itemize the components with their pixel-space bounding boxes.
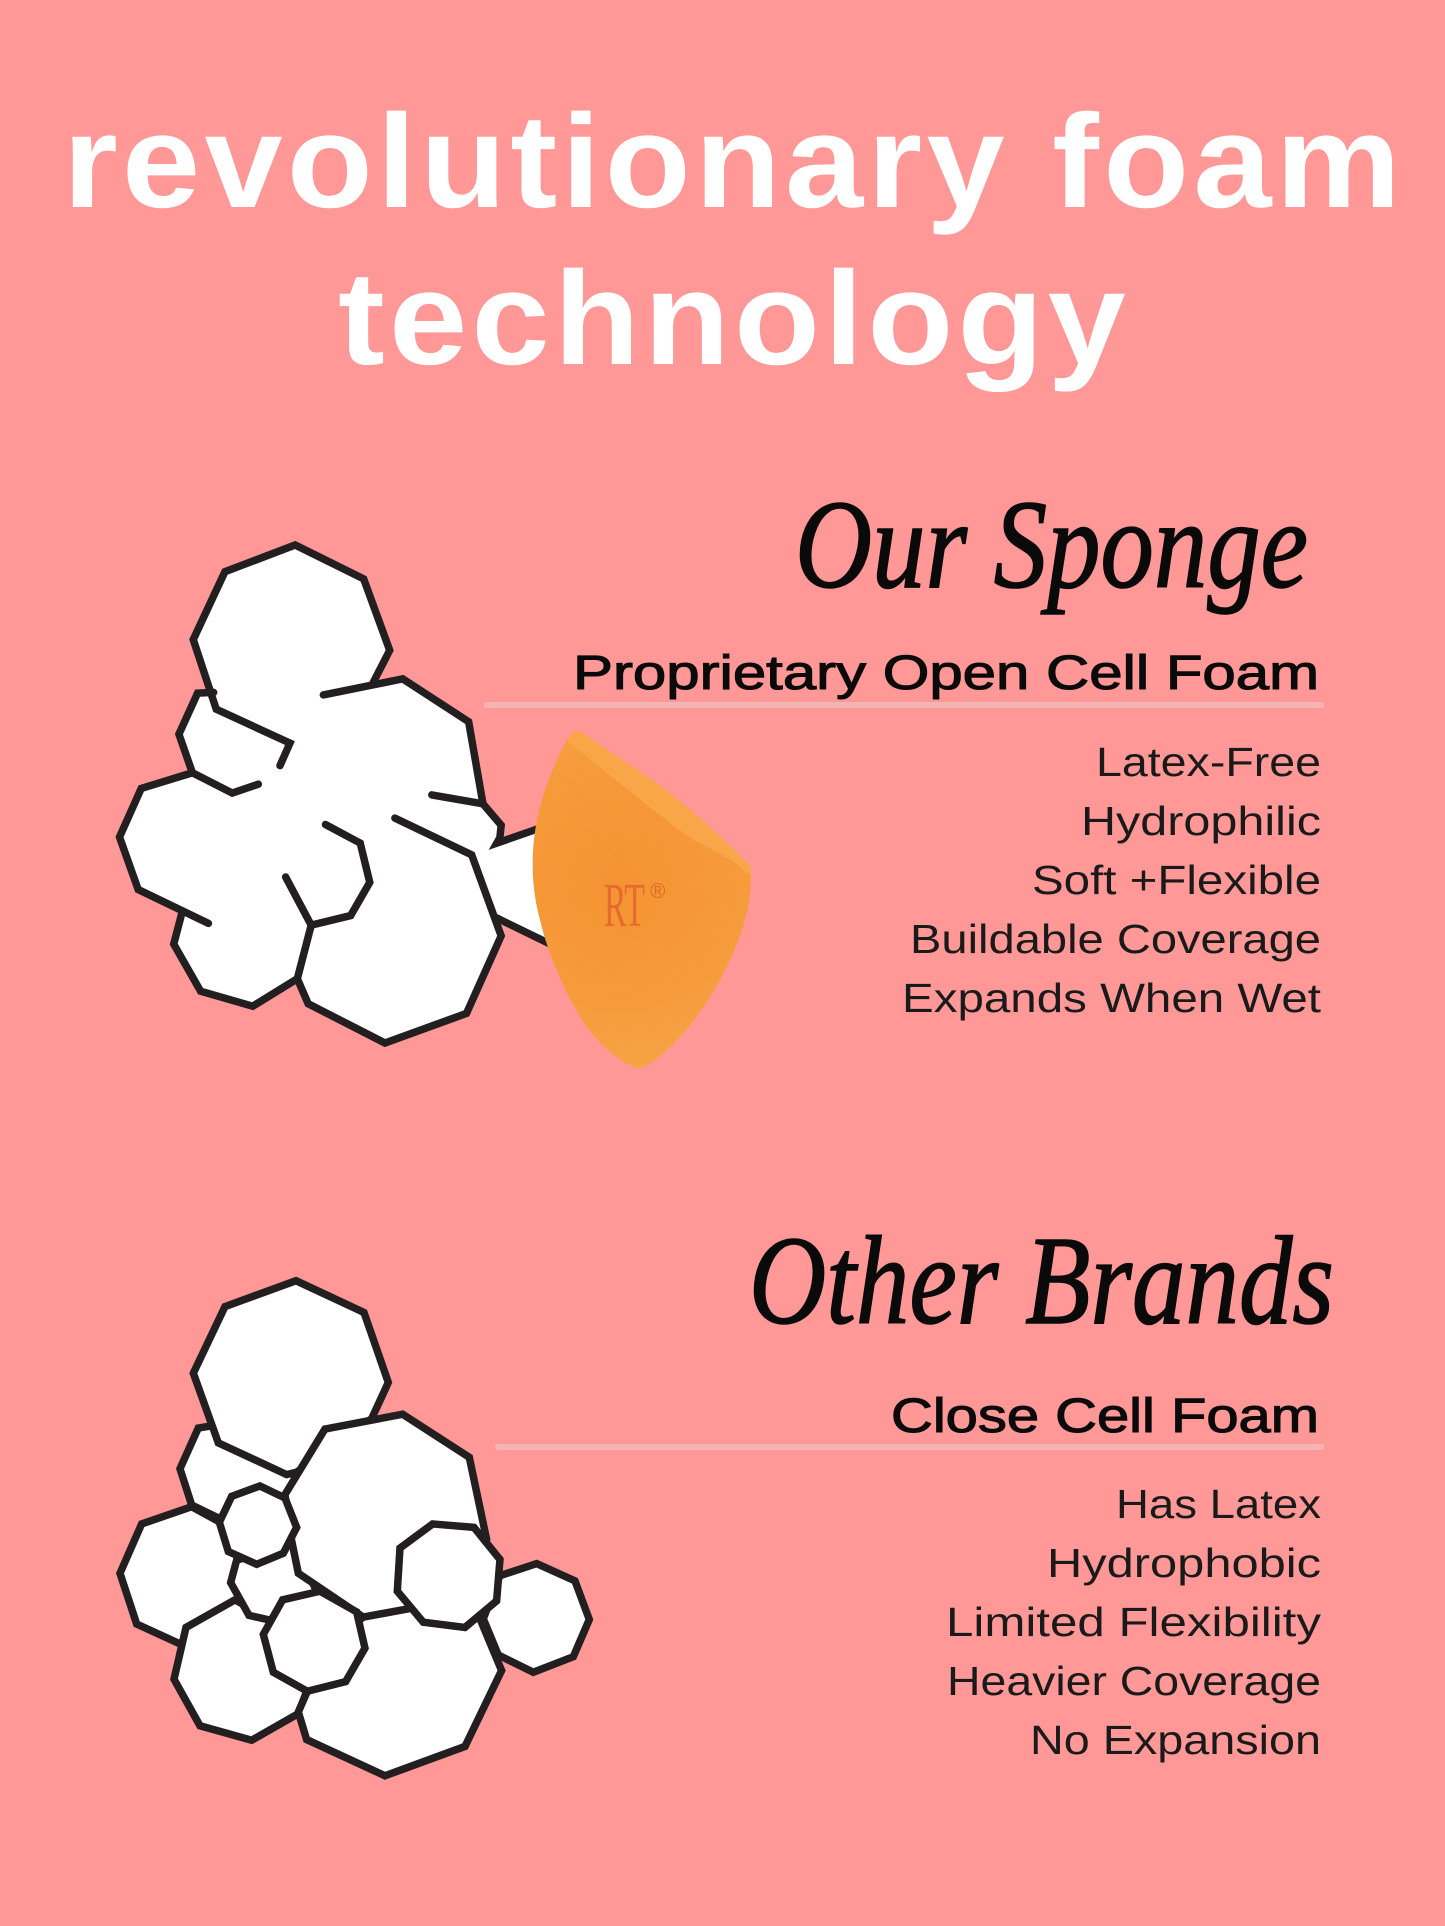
sponge product [533,731,751,1068]
diagram: closed cell foam [120,1281,589,1776]
list: other brands features: Heavier Coverage [947,1658,1321,1704]
title: technology [338,245,1130,393]
list: our sponge features: Buildable Coverage [910,916,1321,962]
title [63,88,1405,393]
subheading: close cell foam: Close Cell Foam [891,1390,1319,1443]
sponge logo: RT [604,872,645,940]
rule [484,702,1324,708]
diagram: open cell foam [120,545,560,1043]
list: other brands features: Has Latex [1116,1481,1322,1527]
list: our sponge features [902,739,1322,1021]
heading: other brands: Other Brands [749,1212,1334,1351]
sponge logo: ® [650,880,666,903]
title: revolutionary foam [63,88,1405,236]
list: other brands features: Hydrophobic [1047,1540,1321,1586]
subheading: proprietary open cell foam: Proprietary Open Cell Foam [573,647,1319,700]
heading: our sponge: Our Sponge [795,476,1308,615]
list: other brands features: Limited Flexibility [946,1599,1322,1645]
list: our sponge features: Latex-Free [1096,739,1321,785]
list: our sponge features: Soft +Flexible [1032,857,1321,903]
list: our sponge features: Expands When Wet [902,975,1322,1021]
list: other brands features: No Expansion [1030,1717,1321,1763]
list: other brands features [946,1481,1322,1763]
list: our sponge features: Hydrophilic [1081,798,1321,844]
rule [495,1444,1324,1450]
